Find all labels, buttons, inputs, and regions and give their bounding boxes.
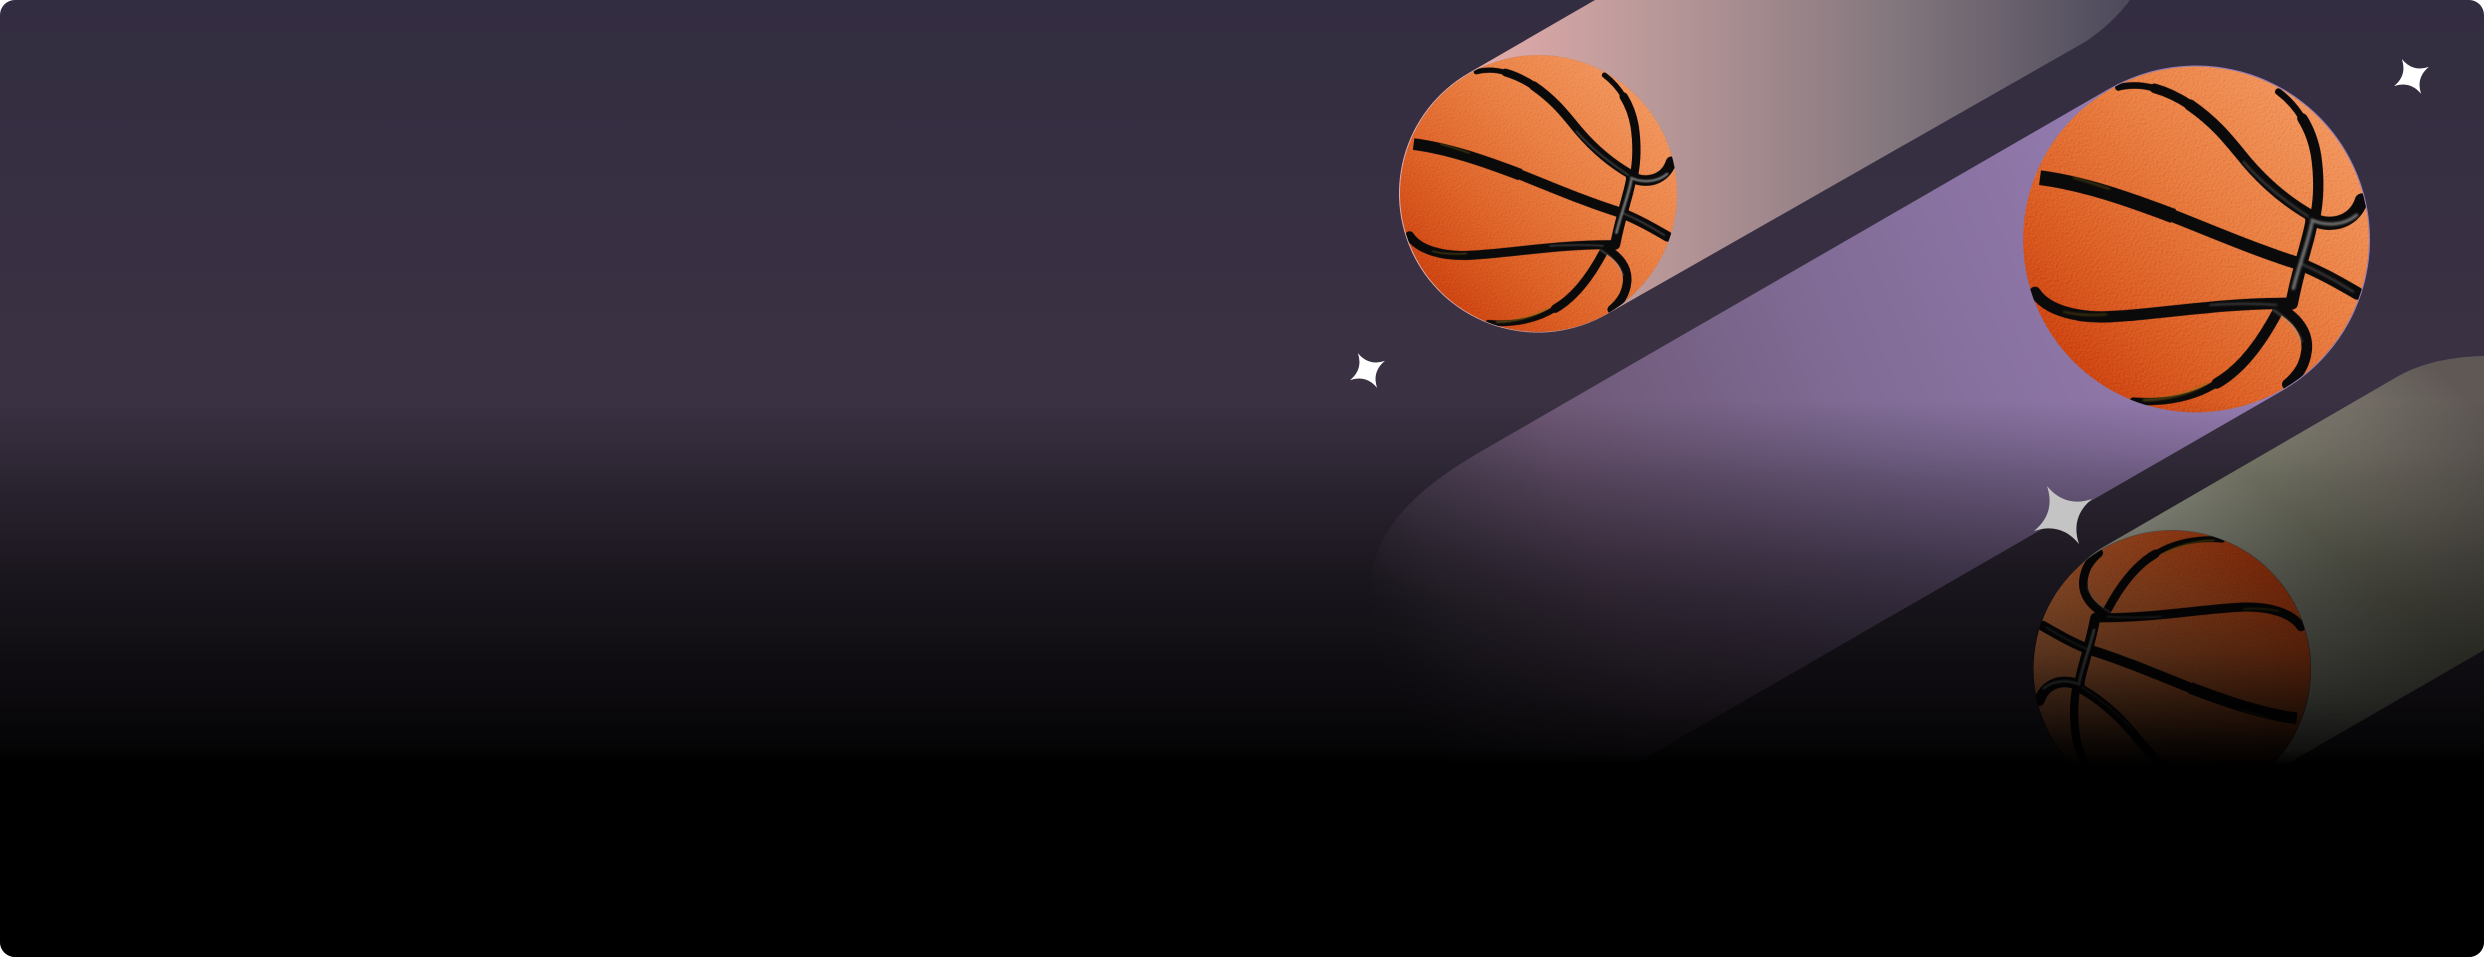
basketball: faded lower <box>2033 530 2311 758</box>
basketball: top right <box>2023 66 2369 413</box>
sparkle: middle <box>2034 486 2092 544</box>
pink diagonal band <box>1399 0 2130 333</box>
sparkle: left <box>1350 353 1385 388</box>
sparkle: top right <box>2394 59 2429 94</box>
purple diagonal band <box>1370 65 2370 837</box>
basketball: top left <box>1400 55 1677 332</box>
olive diagonal band <box>2037 356 2484 806</box>
